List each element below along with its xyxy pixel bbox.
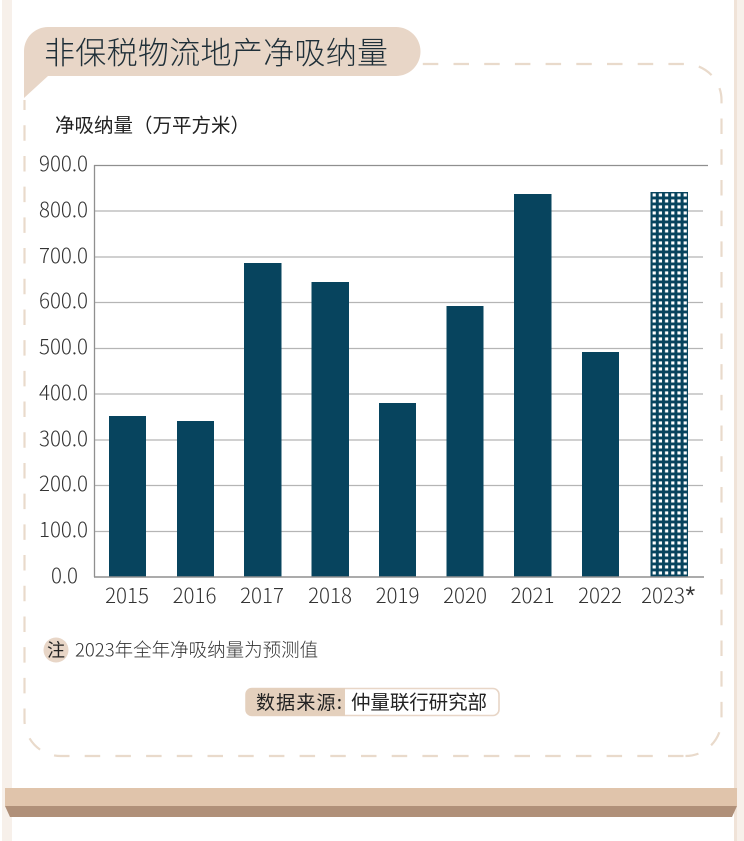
data source tag (245, 686, 499, 716)
shelf divider (5, 788, 737, 817)
title banner: 非保税物流地产净吸纳量 (44, 28, 388, 73)
x axis labels: * (686, 582, 696, 610)
y axis labels: 400.0 (39, 376, 88, 406)
chart unit label: 净吸纳量（万平方米） (55, 109, 250, 138)
x axis labels: 2020 (443, 579, 487, 609)
title banner (24, 27, 420, 98)
y axis labels: 800.0 (39, 193, 88, 223)
footnote badge (44, 638, 68, 662)
left side strip (2, 0, 12, 841)
y axis labels: 700.0 (39, 239, 88, 269)
x axis line (94, 576, 704, 578)
x axis labels: 2022 (578, 579, 622, 609)
x axis labels (105, 579, 696, 610)
dashed panel outline (24, 64, 722, 756)
x axis labels: 2023 (641, 579, 685, 609)
y axis labels: 900.0 (39, 147, 88, 177)
y axis labels: 0.0 (51, 559, 78, 589)
y axis labels: 600.0 (39, 284, 88, 314)
y axis labels: 100.0 (39, 513, 88, 543)
bar chart (39, 147, 708, 610)
grid lines (94, 166, 708, 532)
y axis labels: 300.0 (39, 422, 88, 452)
x axis labels: 2015 (105, 579, 149, 609)
data source tag: 数据来源: (256, 688, 342, 715)
footnote: 2023年全年净吸纳量为预测值 (75, 636, 318, 662)
right side strip (734, 0, 744, 841)
bars (109, 192, 688, 577)
y axis line (94, 165, 96, 577)
x axis labels: 2017 (240, 579, 284, 609)
x axis labels: 2018 (308, 579, 352, 609)
y axis labels: 200.0 (39, 467, 88, 497)
data source tag: 仲量联行研究部 (351, 686, 487, 715)
x axis labels: 2021 (511, 579, 554, 609)
x axis labels: 2019 (376, 579, 419, 609)
y axis labels: 500.0 (39, 330, 88, 360)
footnote: 注 (47, 636, 65, 662)
y axis labels (39, 147, 88, 589)
x axis labels: 2016 (173, 579, 216, 609)
